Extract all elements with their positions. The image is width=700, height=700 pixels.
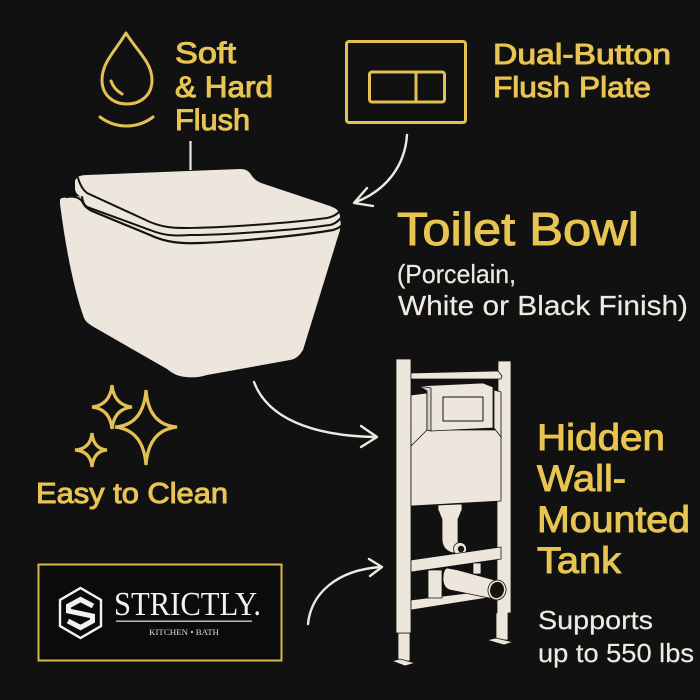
drain opening xyxy=(458,546,464,552)
icon: S hexagon xyxy=(60,588,101,638)
seat outlines xyxy=(66,178,342,243)
icon: water drop xyxy=(100,33,153,126)
hidden tank frame illustration xyxy=(392,359,513,666)
brand rule xyxy=(116,620,252,622)
pipe flange xyxy=(486,578,508,602)
text: supports up to 550 lbs xyxy=(538,605,694,668)
text: porcelain finish xyxy=(397,259,688,321)
top bar xyxy=(411,371,502,379)
text: porcelain finish: (Porcelain, xyxy=(397,259,516,289)
right foot base xyxy=(487,638,513,645)
text: porcelain finish: White or Black Finish) xyxy=(398,290,688,321)
heading: hidden wall-mounted tank: Hidden xyxy=(537,417,665,458)
support posts xyxy=(428,570,442,598)
tank body xyxy=(411,430,501,506)
brand logo box xyxy=(38,564,282,660)
heading: dual-button flush plate xyxy=(493,39,671,104)
left bracket xyxy=(411,393,427,446)
right upright xyxy=(496,361,511,640)
heading: hidden wall-mounted tank xyxy=(537,417,690,581)
arrow: plate to bowl xyxy=(354,135,407,206)
left upright xyxy=(396,359,411,633)
arrow: logo to tank xyxy=(308,559,382,624)
text: supports up to 550 lbs: Supports xyxy=(538,605,653,635)
heading: soft and hard flush: & Hard xyxy=(175,71,273,104)
connector: flush to bowl xyxy=(189,141,192,170)
heading: hidden wall-mounted tank: Tank xyxy=(537,540,622,581)
heading: dual-button flush plate: Dual-Button xyxy=(493,39,671,71)
heading: dual-button flush plate: Flush Plate xyxy=(493,72,651,104)
left foot xyxy=(398,633,410,661)
flush box xyxy=(419,383,493,431)
brand tagline: KITCHEN • BATH xyxy=(149,627,219,637)
text: supports up to 550 lbs: up to 550 lbs xyxy=(538,638,694,668)
heading: hidden wall-mounted tank: Wall- xyxy=(537,458,626,499)
icon: sparkles xyxy=(75,385,177,467)
bowl body xyxy=(60,196,340,377)
flush opening xyxy=(443,397,483,421)
heading: soft and hard flush: Flush xyxy=(175,104,250,137)
middle crossbar xyxy=(411,547,501,572)
drain pipe xyxy=(438,504,462,553)
lower pipe xyxy=(443,568,498,599)
pipe opening xyxy=(489,581,505,599)
icon: dual-button flush plate xyxy=(346,42,466,122)
brand name: STRICTLY. xyxy=(114,586,261,623)
heading: easy to clean: Easy to Clean xyxy=(36,478,228,510)
heading: soft and hard flush xyxy=(175,37,273,137)
lower crossbar xyxy=(411,590,493,610)
arrow: bowl to tank xyxy=(254,382,377,447)
left foot base xyxy=(392,659,415,666)
heading: soft and hard flush: Soft xyxy=(175,37,237,70)
drain elbow xyxy=(454,542,466,556)
heading: hidden wall-mounted tank: Mounted xyxy=(537,499,690,540)
right bracket xyxy=(494,390,501,437)
flush box side xyxy=(419,386,431,431)
toilet bowl illustration xyxy=(60,169,342,377)
seat lid xyxy=(75,169,341,243)
heading: toilet bowl: Toilet Bowl xyxy=(397,203,639,255)
